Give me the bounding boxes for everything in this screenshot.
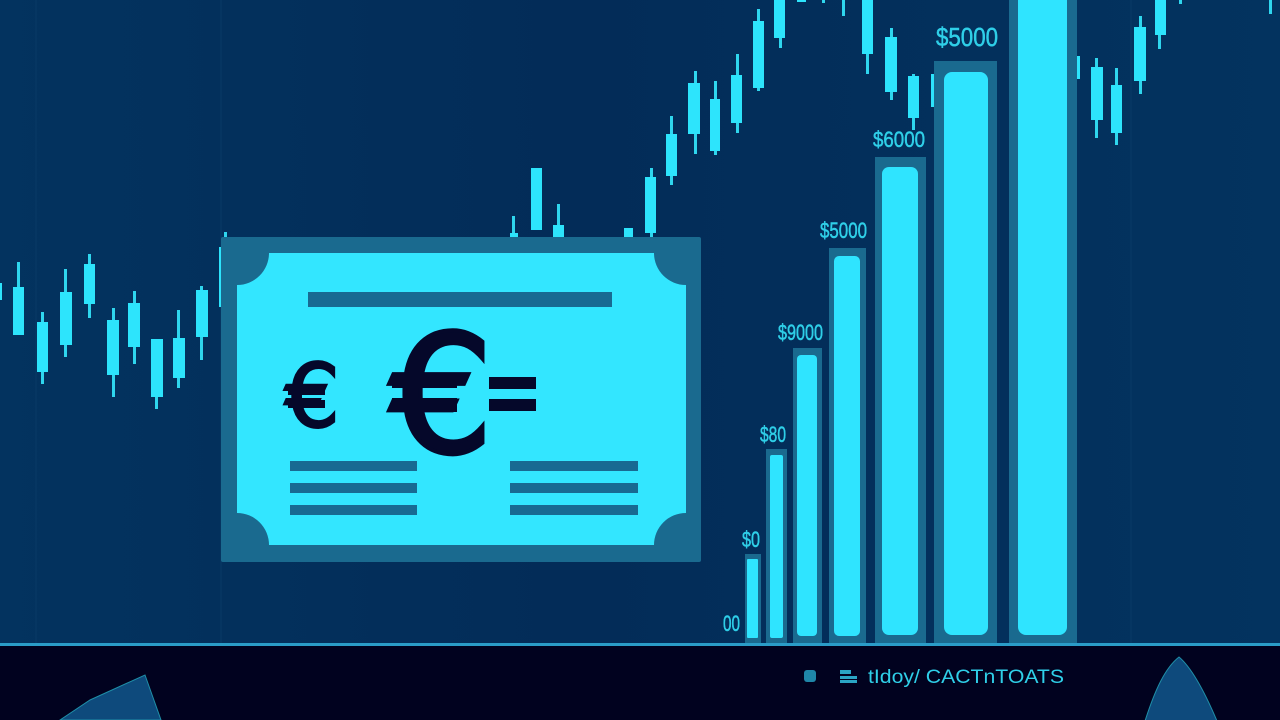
large euro symbol: €	[389, 300, 493, 491]
value labels: $0	[742, 527, 760, 552]
candles: rising group	[510, 0, 785, 237]
candles: peak group	[797, 0, 934, 130]
note title bar	[308, 292, 612, 307]
value labels: $6000	[873, 127, 925, 152]
bar 1	[745, 554, 761, 643]
candlestick chart	[0, 0, 1272, 409]
bar 5	[875, 157, 926, 643]
note face	[237, 253, 686, 545]
legend icon	[840, 670, 857, 683]
value labels: 00	[723, 611, 740, 636]
bar chart	[723, 0, 1077, 643]
legend marker	[804, 670, 816, 682]
value labels: $9000	[778, 320, 823, 345]
bar 3	[793, 348, 822, 643]
right text lines	[510, 461, 638, 515]
candles: right group	[1077, 0, 1272, 145]
bar 2	[766, 449, 787, 643]
value labels: $5000	[936, 22, 998, 52]
footer caption: tIdoy/ CACTnTOATS	[868, 667, 1064, 688]
bar 7	[1009, 0, 1077, 643]
bar 4	[829, 248, 866, 643]
footer left peak	[60, 675, 161, 720]
value labels: $80	[760, 422, 786, 447]
footer band	[0, 643, 1280, 720]
candles: left group	[0, 232, 227, 409]
small euro symbol: €	[284, 345, 340, 448]
banknote	[221, 237, 701, 562]
left text lines	[290, 461, 417, 515]
equals sign	[489, 377, 536, 411]
value labels: $5000	[820, 218, 867, 243]
note frame	[221, 237, 701, 562]
value labels	[723, 22, 998, 636]
bar 6	[934, 61, 997, 643]
footer right peak	[1145, 657, 1217, 720]
